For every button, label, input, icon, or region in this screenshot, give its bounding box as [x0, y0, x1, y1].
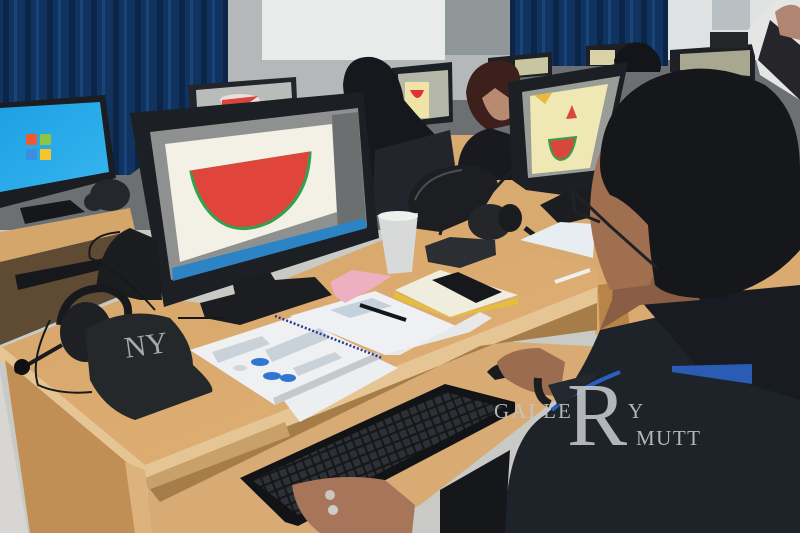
front headset — [14, 288, 128, 393]
yellow notebook and phone — [393, 270, 518, 318]
open booklet left — [190, 316, 382, 405]
watermark: Gallery RMUTT — [494, 366, 702, 465]
front desk leg panel — [5, 360, 148, 533]
center headset — [440, 170, 534, 240]
back cpu and headset behind monitor — [96, 228, 162, 300]
open booklet right with pen — [290, 291, 492, 355]
watermark: Gallery RMUTT: R — [567, 366, 627, 465]
second desk front edge and drawer — [0, 287, 597, 502]
pink tissue — [330, 270, 392, 303]
floor tiles — [0, 372, 28, 533]
projector wall — [228, 0, 510, 100]
back monitors row — [188, 32, 755, 128]
small black case — [425, 237, 496, 268]
glass of water — [378, 211, 418, 274]
watermark: Gallery RMUTT: MUTT — [636, 426, 702, 450]
glasses — [572, 190, 657, 268]
left curtain — [0, 0, 236, 175]
seated woman with long black hair — [343, 57, 455, 215]
right curtain — [510, 0, 668, 66]
second woman — [458, 60, 520, 180]
watermelon graphic — [191, 153, 310, 229]
man's jacket — [440, 285, 800, 533]
pen on desk — [555, 270, 590, 282]
dark classroom backdrop behind desks — [0, 60, 800, 230]
watermark: Gallery RMUTT: GALLE — [494, 399, 573, 423]
paper sheet lower — [272, 350, 398, 422]
black NY cap — [85, 314, 212, 420]
right monitor with drawing — [508, 62, 628, 225]
mouse and hand — [487, 348, 565, 396]
main monitor — [130, 92, 379, 307]
black chair — [408, 165, 498, 232]
watermark: Gallery RMUTT: Y — [628, 399, 643, 423]
right desk — [595, 245, 800, 335]
person top right — [748, 0, 800, 100]
typing hand — [292, 477, 415, 533]
man's neck and face — [590, 142, 700, 330]
cable — [89, 232, 222, 318]
black NY cap: NY — [122, 326, 170, 365]
main monitor stand — [200, 272, 332, 325]
woman far right — [614, 43, 661, 72]
keyboard — [240, 384, 515, 526]
man's dark hair — [600, 69, 800, 298]
keyboard tray — [148, 340, 622, 533]
back desk area — [440, 135, 800, 300]
right wall and window — [668, 0, 800, 60]
main front desk top — [0, 225, 598, 467]
paper right of monitor — [520, 222, 595, 258]
back headset left — [84, 179, 130, 211]
left desk — [0, 208, 135, 345]
left monitor with windows desktop — [0, 95, 116, 224]
